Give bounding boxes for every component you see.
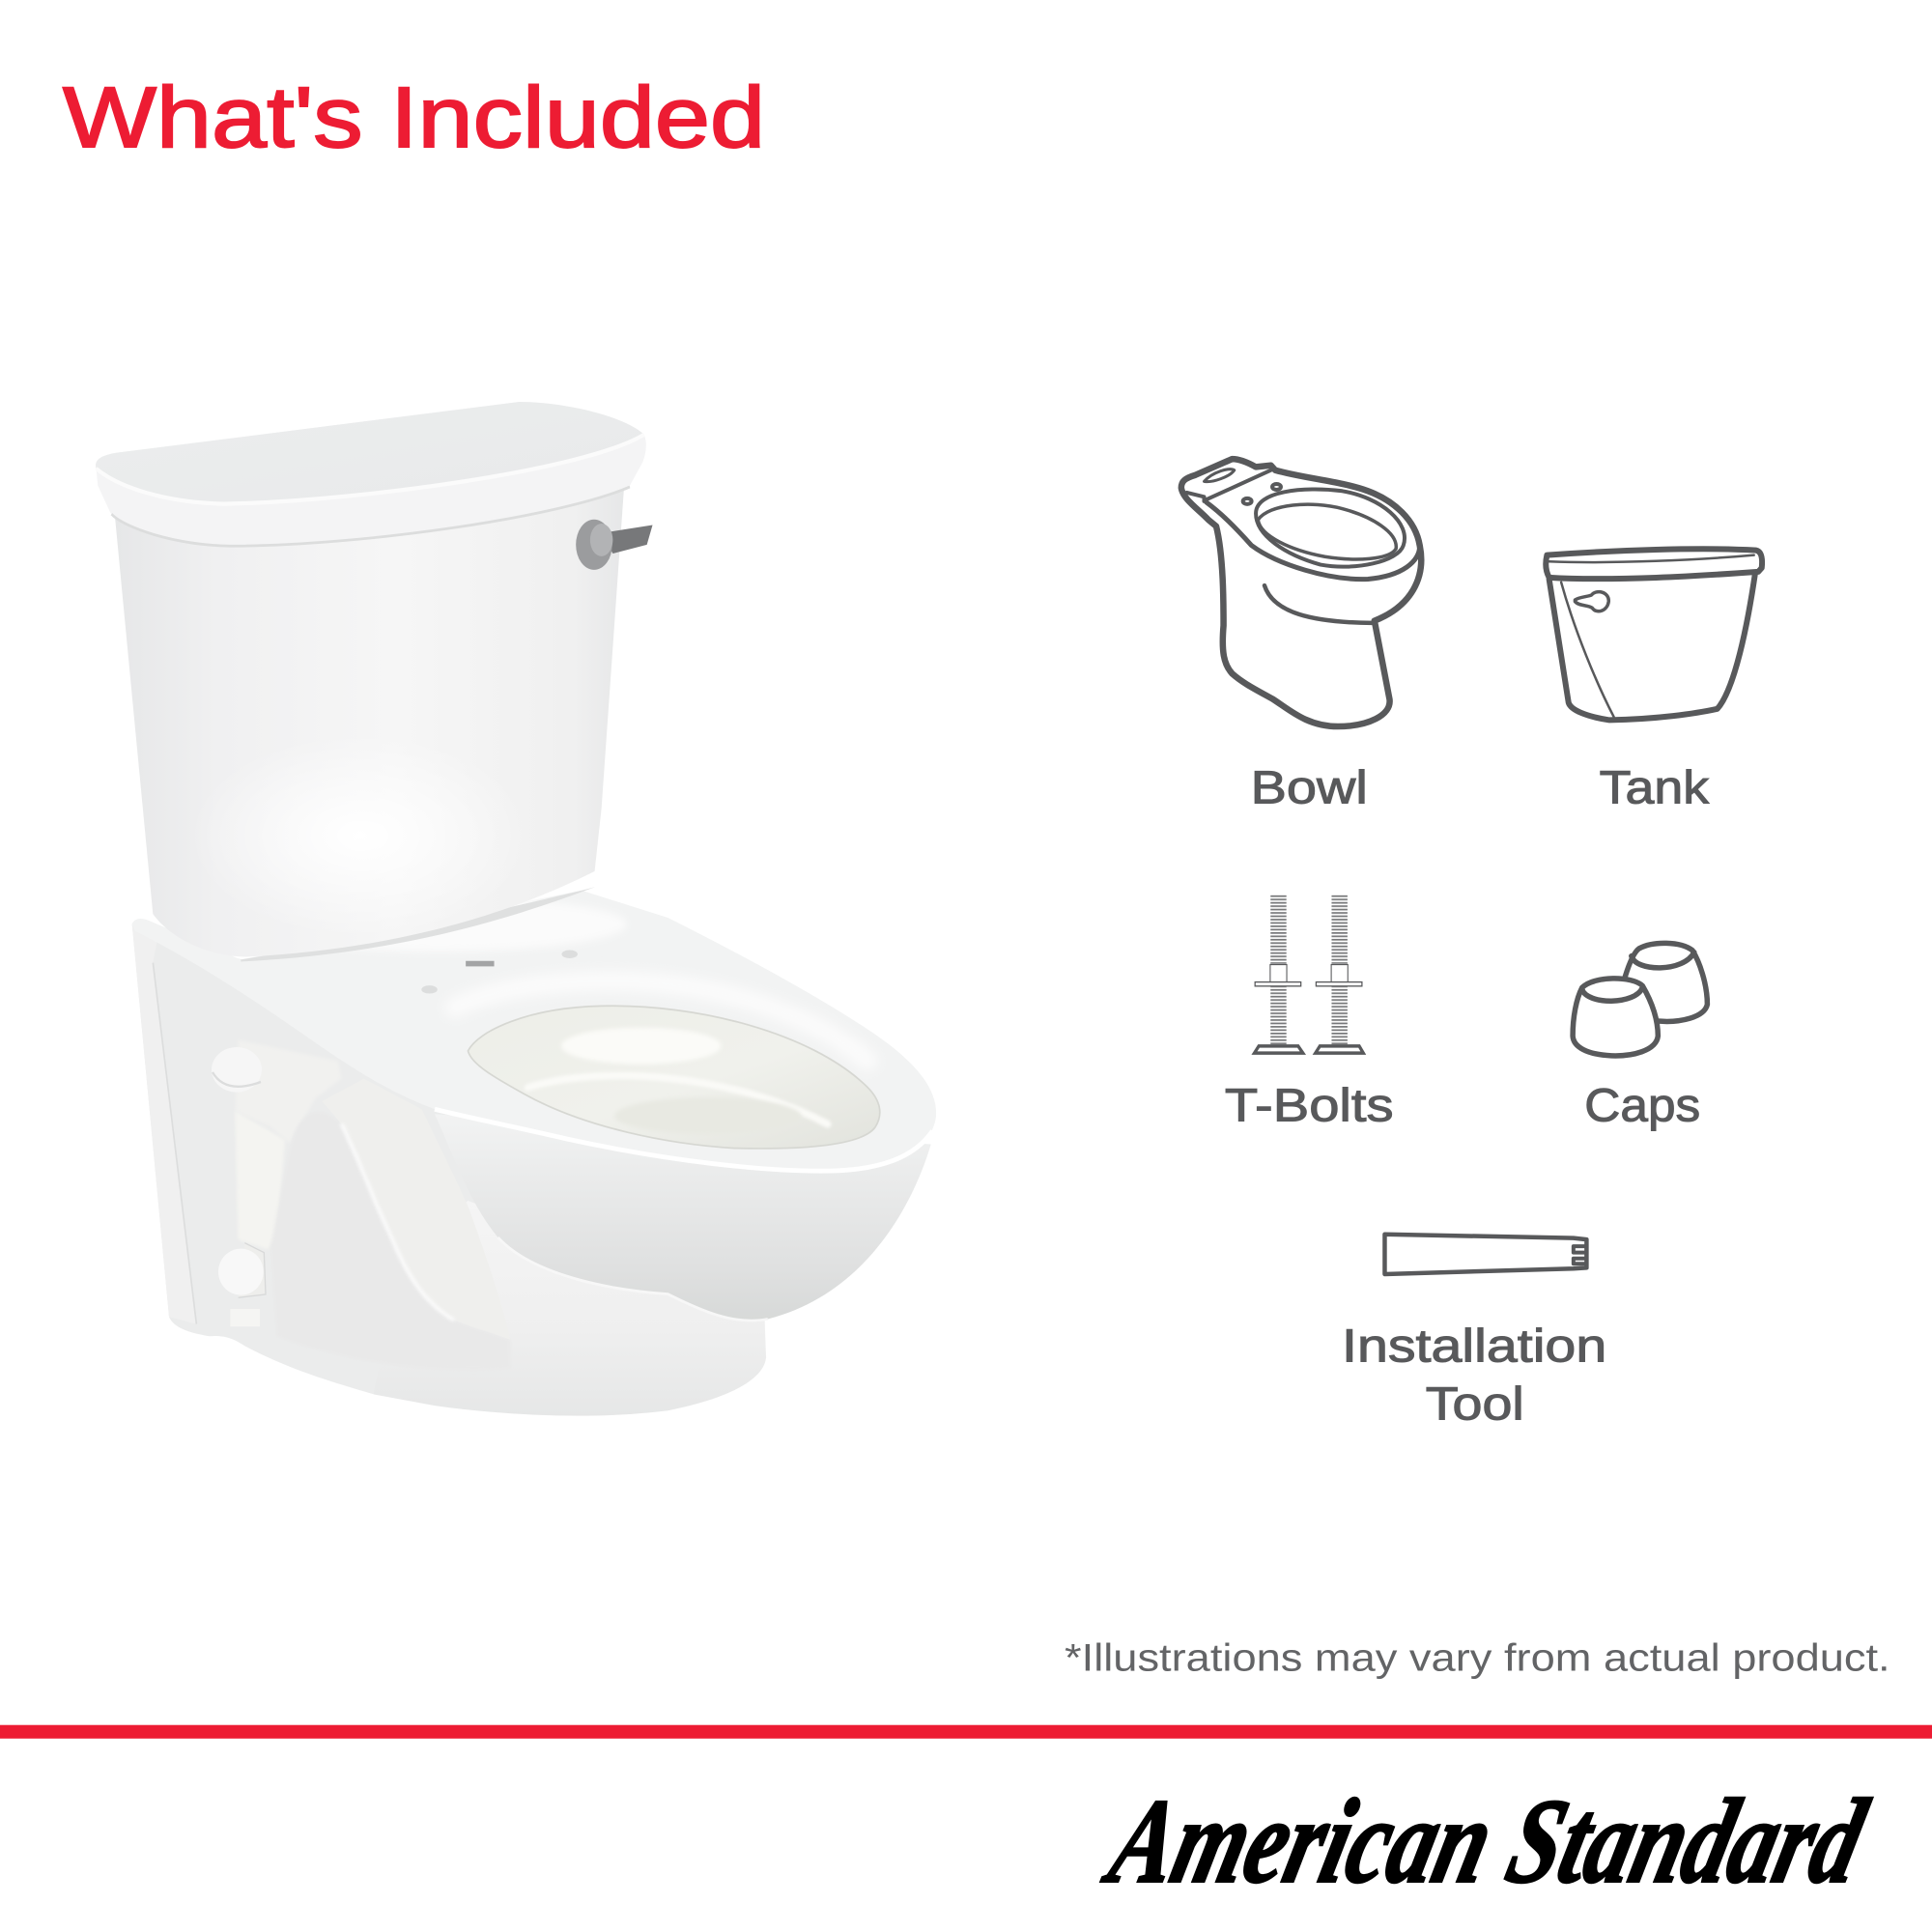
label: Installation Tool: Tool	[1426, 1378, 1524, 1430]
label: Tank: Tank	[1600, 762, 1710, 814]
bolt left	[1254, 895, 1303, 1053]
label: Bowl: Bowl	[1251, 762, 1368, 814]
footnote: *Illustrations may vary from actual product.	[1065, 1637, 1890, 1680]
red divider bar	[0, 1725, 1932, 1739]
product photo: wall-hung toilet	[96, 402, 936, 1416]
deck and rim	[132, 891, 936, 1171]
label: T-Bolts: T-Bolts	[1225, 1080, 1394, 1132]
bolt right	[1316, 895, 1363, 1053]
label: Caps: Caps	[1584, 1080, 1700, 1132]
icon: installation tool	[1384, 1235, 1586, 1274]
tank and lid	[96, 402, 653, 994]
label: Installation Tool	[1342, 1320, 1606, 1430]
icon: bowl	[1181, 459, 1421, 726]
icon: tank	[1546, 549, 1762, 720]
icon: T-bolts	[1254, 895, 1363, 1053]
label: Installation Tool: Installation	[1342, 1320, 1606, 1372]
back plate	[132, 924, 567, 1394]
tank body	[115, 486, 624, 957]
bowl opening	[468, 1006, 880, 1149]
icon: caps	[1573, 943, 1707, 1056]
tank lid	[96, 402, 646, 545]
flush handle	[576, 520, 653, 570]
title: What's Included	[63, 69, 765, 165]
pedestal and bowl underside	[374, 1114, 931, 1416]
trapway fairing	[270, 1079, 510, 1370]
